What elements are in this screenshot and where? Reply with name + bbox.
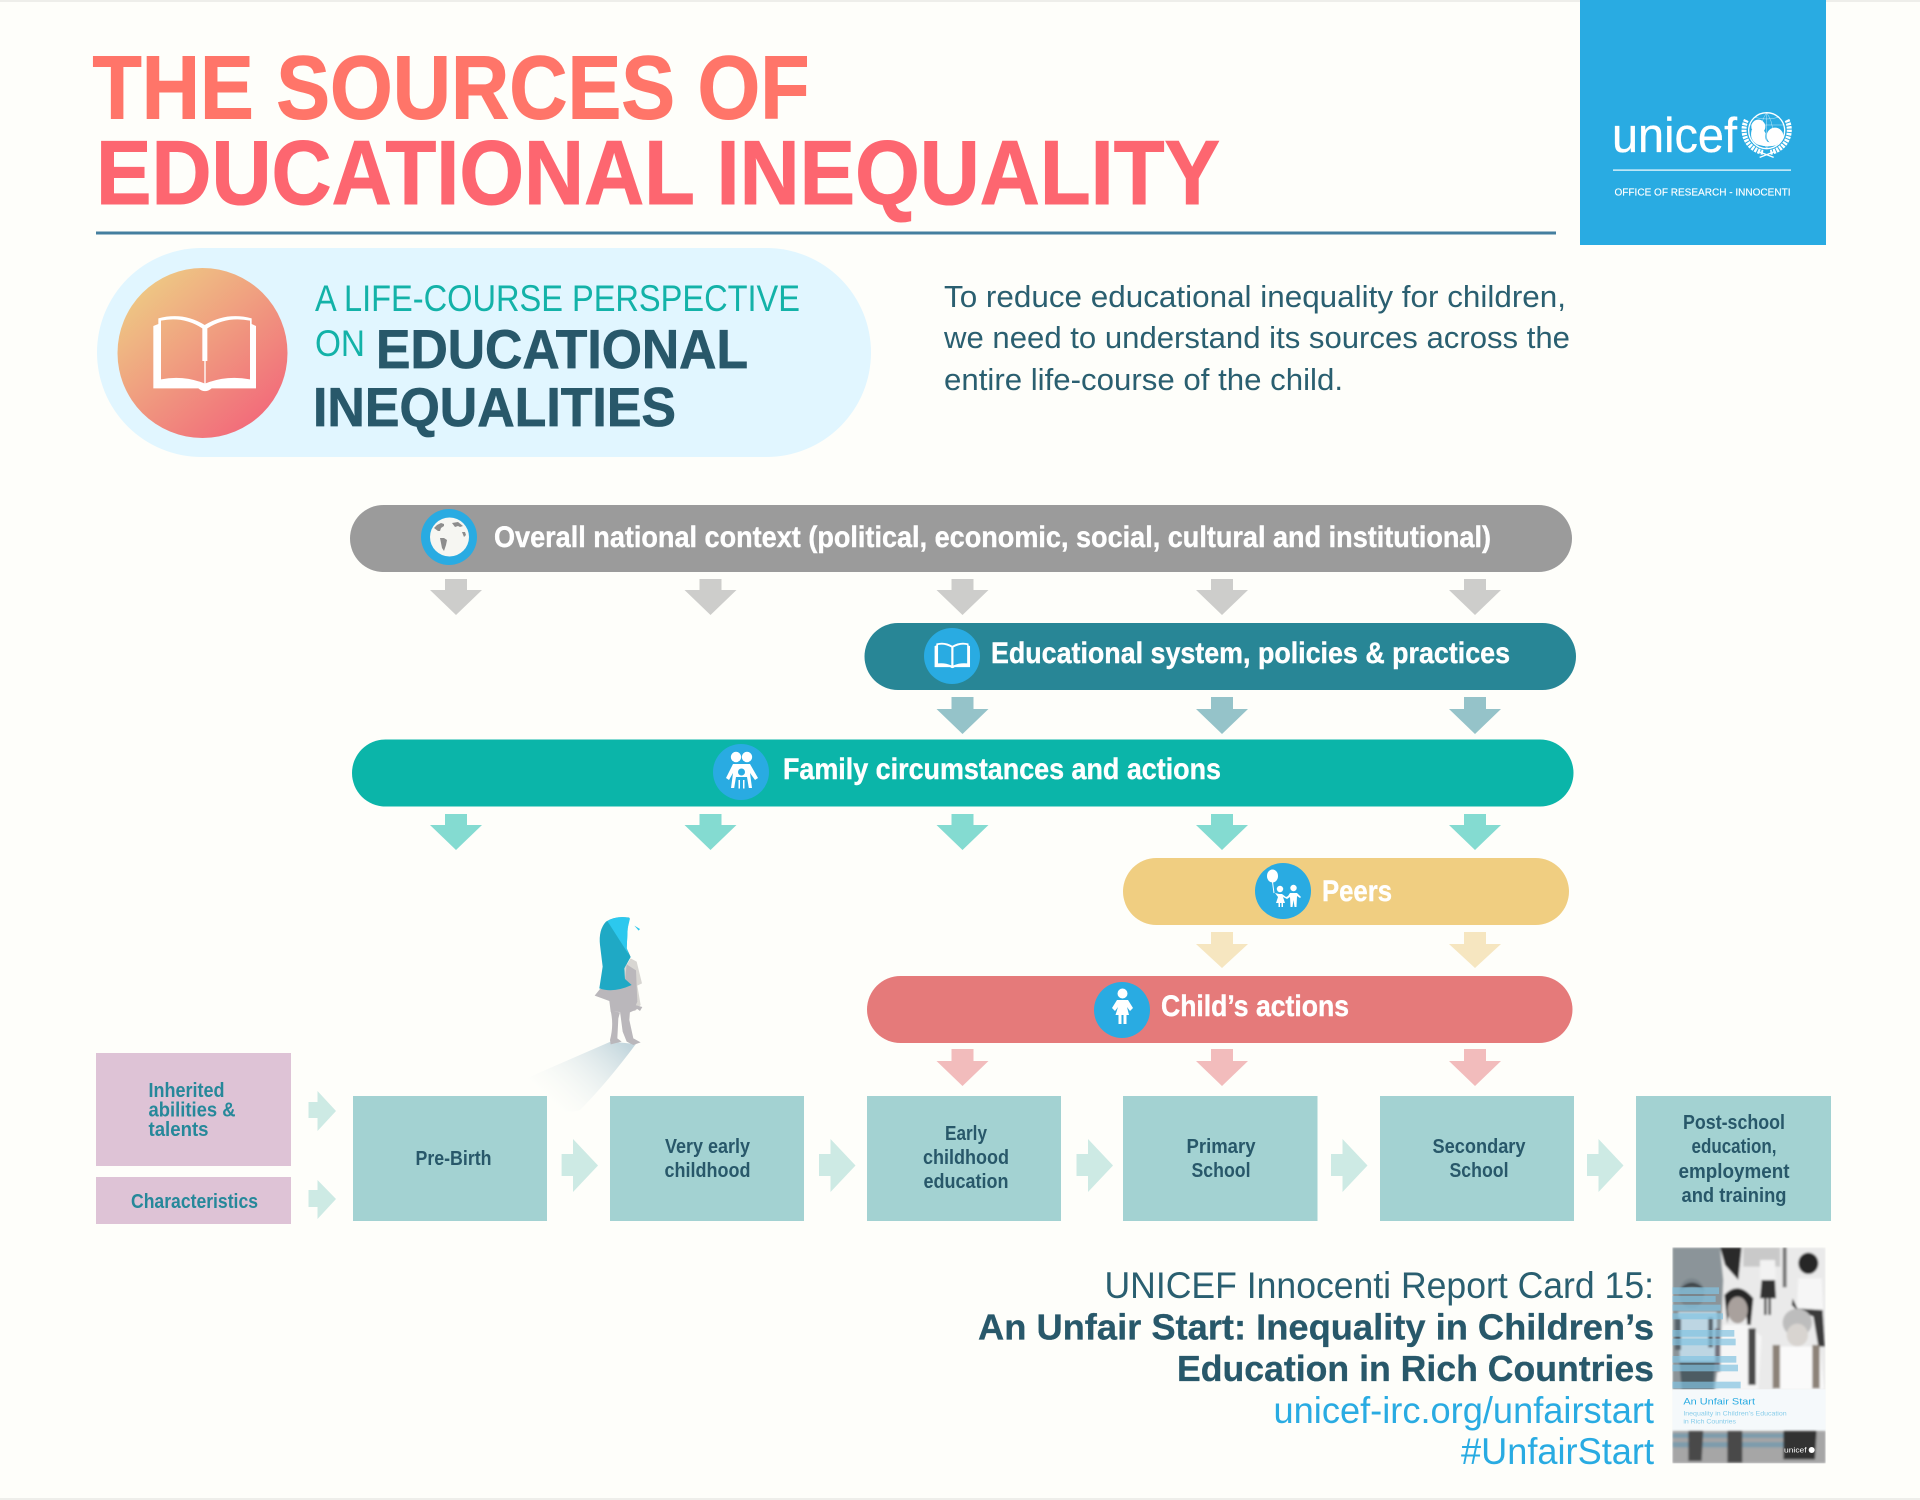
icon: globe: [421, 509, 477, 565]
report cover: Inequality in Children’s Education: [1683, 1410, 1787, 1417]
panel: life-course perspective: [97, 248, 871, 457]
box: post-school education: [1636, 1096, 1831, 1221]
report cover: [1672, 1247, 1826, 1463]
box: inherited abilities & talents: abilities &: [148, 1100, 236, 1122]
bar: overall national context: [350, 505, 1572, 572]
arrows: from family circumstances: [430, 814, 1501, 850]
box: pre-birth: [353, 1096, 547, 1221]
box: characteristics: [96, 1177, 291, 1224]
box: inherited abilities & talents: [96, 1053, 291, 1166]
heading: life-course perspective: EDUCATIONAL: [376, 318, 748, 380]
icon: peers: [1255, 863, 1311, 919]
report cover: An Unfair Start: [1683, 1396, 1755, 1406]
bar: family circumstances: Family circumstances and actions: [783, 753, 1221, 786]
box: post-school education: education,: [1692, 1136, 1776, 1158]
icon: child: [1094, 982, 1150, 1038]
bar: child's actions: [867, 976, 1572, 1043]
title: EDUCATIONAL INEQUALITY: [96, 123, 1220, 224]
intro paragraph: we need to understand its sources across the: [943, 320, 1570, 355]
intro paragraph: [943, 279, 1570, 397]
box: secondary school: [1380, 1096, 1574, 1221]
title: [92, 38, 1220, 224]
box: primary school: School: [1192, 1160, 1250, 1182]
unicef logo panel: unicef: [1612, 109, 1737, 163]
intro paragraph: To reduce educational inequality for children,: [944, 279, 1566, 314]
bar: family circumstances: [352, 740, 1574, 806]
icon: book: [924, 628, 980, 684]
icon: family: [713, 744, 769, 800]
bar: overall national context: Overall national context (political, economic, social, cultural and institutional): [494, 521, 1491, 554]
box: post-school education: Post-school: [1683, 1112, 1785, 1134]
heading: life-course perspective: INEQUALITIES: [313, 376, 676, 438]
box: very early childhood: childhood: [664, 1160, 750, 1182]
box: primary school: Primary: [1186, 1136, 1256, 1158]
unicef logo panel: OFFICE OF RESEARCH - INNOCENTI: [1614, 186, 1790, 198]
bar: peers: Peers: [1322, 875, 1392, 908]
box: post-school education: employment: [1678, 1161, 1790, 1183]
intro paragraph: entire life-course of the child.: [944, 362, 1343, 397]
heading: life-course perspective: ON: [315, 323, 365, 364]
icon: open book: [118, 268, 288, 438]
footer: report citation: Education in Rich Countries: [1177, 1348, 1654, 1389]
bar: educational system: Educational system, policies & practices: [991, 637, 1510, 670]
box: early childhood education: Early: [945, 1123, 988, 1145]
report cover: unicef: [1784, 1446, 1808, 1455]
footer: report citation: UNICEF Innocenti Report Card 15:: [1104, 1265, 1654, 1306]
illustration: girl with shadow: [519, 917, 642, 1112]
box: characteristics: Characteristics: [131, 1191, 258, 1213]
report cover: in Rich Countries: [1683, 1419, 1736, 1426]
box: secondary school: Secondary: [1432, 1136, 1526, 1158]
footer: report citation: [978, 1265, 1655, 1472]
bar: peers: [1123, 858, 1569, 925]
box: early childhood education: education: [924, 1171, 1008, 1193]
arrows: from national context: [430, 579, 1501, 615]
box: secondary school: School: [1450, 1160, 1508, 1182]
box: inherited abilities & talents: Inherited: [148, 1080, 224, 1102]
box: pre-birth: Pre-Birth: [416, 1148, 492, 1170]
box: early childhood education: childhood: [923, 1147, 1009, 1169]
bar: educational system: [864, 623, 1576, 690]
arrows: between stages: [562, 1139, 1624, 1192]
arrows: from educational system: [936, 697, 1501, 734]
box: inherited abilities & talents: talents: [148, 1119, 208, 1141]
heading: life-course perspective: [313, 278, 800, 438]
title: THE SOURCES OF: [92, 38, 810, 138]
box: early childhood education: [867, 1096, 1061, 1221]
box: very early childhood: [610, 1096, 804, 1221]
box: primary school: [1123, 1096, 1318, 1221]
arrows: into pre-birth: [308, 1091, 336, 1219]
arrows: from child's actions: [936, 1049, 1501, 1086]
icon: unicef emblem: [1744, 113, 1789, 157]
bar: child's actions: Child’s actions: [1161, 990, 1349, 1023]
unicef logo panel: [1580, 0, 1826, 245]
box: post-school education: and training: [1682, 1185, 1786, 1207]
arrows: from peers: [1196, 932, 1501, 968]
footer: report citation: unicef-irc.org/unfairstart: [1274, 1390, 1655, 1431]
footer: report citation: #UnfairStart: [1461, 1431, 1655, 1472]
heading: life-course perspective: A LIFE-COURSE PERSPECTIVE: [315, 278, 800, 319]
box: very early childhood: Very early: [665, 1136, 751, 1158]
footer: report citation: An Unfair Start: Inequality in Children’s: [978, 1306, 1654, 1348]
